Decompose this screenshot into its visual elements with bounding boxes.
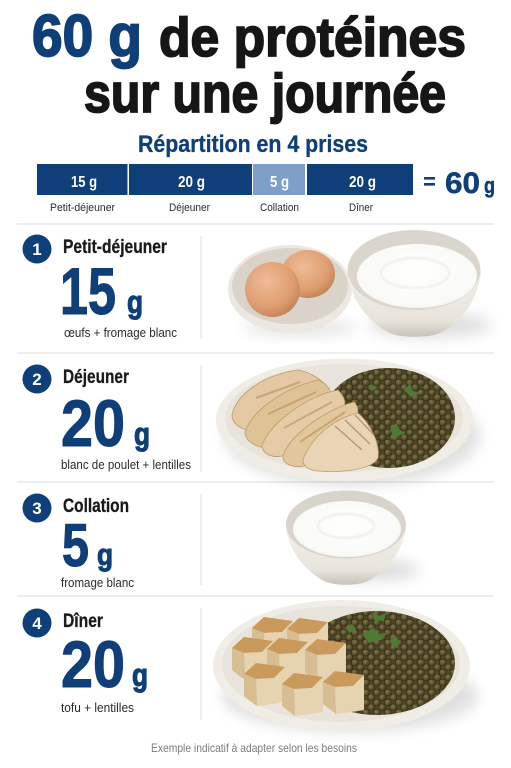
foods text: tofu + lentilles [61,700,134,715]
stacked bar: 4 prises: 5 g [270,174,289,191]
stacked bar: 4 prises: Déjeuner [169,202,210,214]
amount: 5 g [62,512,113,579]
total: = 60 g: g [484,173,495,198]
heading: déjeuner: Déjeuner [63,367,129,388]
total: = 60 g: 60 [445,167,480,200]
title: sur une journée [84,62,446,124]
footer note: Exemple indicatif à adapter selon les besoins [151,741,357,755]
number badge 1 [22,234,52,264]
amount: 20 g: 20 [61,627,125,701]
amount: 15 g: g [127,284,143,320]
panel: petit-déjeuner [22,230,492,340]
number badge 2: 2 [32,370,42,389]
photo: bowl of fromage blanc [286,490,420,585]
amount: 20 g: g [134,416,150,452]
heading: petit-déjeuner: Petit-déjeuner [63,237,167,258]
amount: 20 g: 20 [61,386,125,460]
stacked bar: 4 prises: 15 g [71,174,97,191]
stacked bar: 4 prises: 20 g [349,174,376,191]
foods text: blanc de poulet + lentilles [61,457,191,472]
stacked bar: 4 prises: Petit-déjeuner [50,202,115,214]
stacked bar: 4 prises: Dîner [349,202,373,214]
number badge 1: 1 [32,240,42,259]
heading: dîner: Dîner [63,611,103,632]
amount: 5 g: 5 [62,512,89,579]
title: 60 g [32,3,142,69]
number badge 2 [22,364,52,394]
number badge 3: 3 [32,499,42,518]
title [32,3,466,124]
title: de protéines [159,6,466,68]
amount: 15 g: 15 [60,254,116,328]
stacked bar: 4 prises: Collation [260,202,299,214]
photo: chicken and lentils plate [216,358,480,486]
stacked bar: 4 prises [37,164,413,214]
photo: tofu and lentils plate [213,600,478,732]
total: = 60 g [424,167,495,200]
heading: collation: Collation [63,496,129,517]
number badge 4: 4 [32,614,42,633]
number badge 4 [22,608,52,638]
subtitle: Répartition en 4 prises [138,131,368,158]
number badge 3 [22,494,52,522]
panel: collation [22,490,420,590]
amount: 20 g: g [132,657,148,693]
photo: eggs on plate and bowl of fromage blanc [228,230,492,338]
stacked bar: 4 prises: 20 g [178,174,205,191]
foods text: œufs + fromage blanc [64,325,177,340]
foods text: fromage blanc [61,575,134,590]
panel: dîner [22,600,478,732]
panel: déjeuner [22,358,480,486]
amount: 5 g: g [97,537,113,572]
